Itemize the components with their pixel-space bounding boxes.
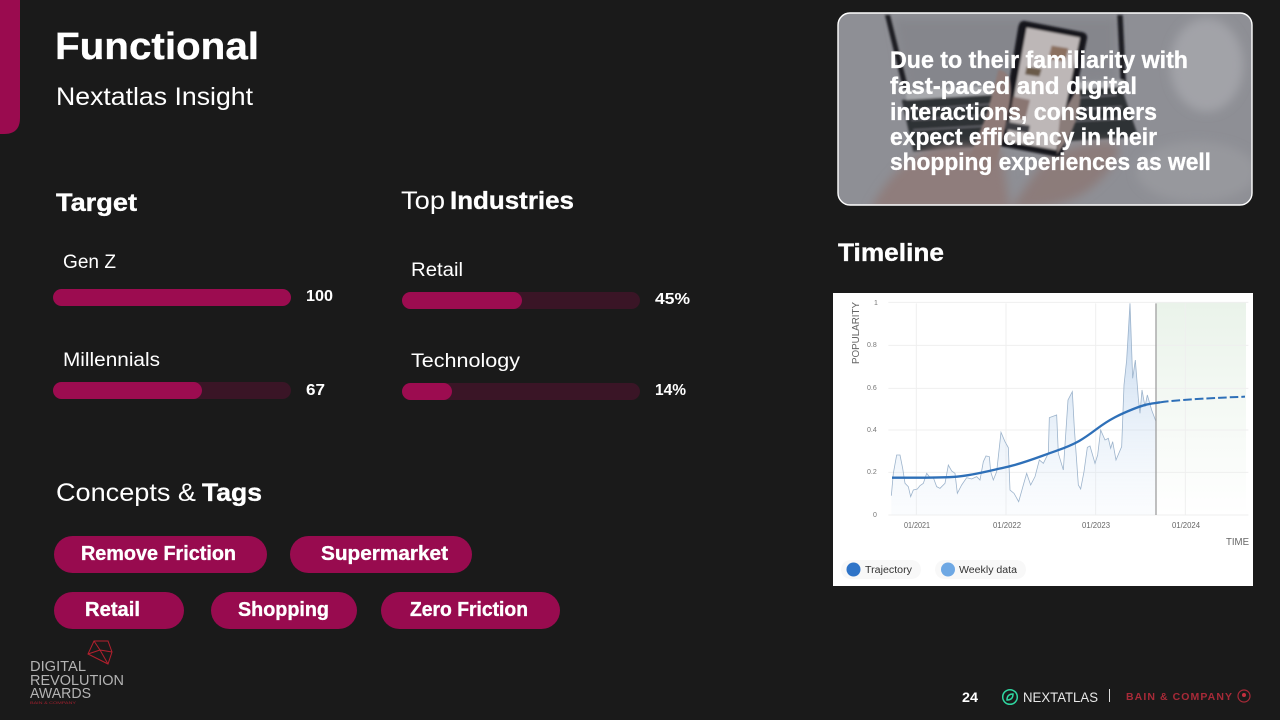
y axis labels	[867, 300, 878, 519]
y axis labels: 0.8	[867, 342, 877, 349]
photo: hands holding phone over laptop	[838, 13, 1257, 210]
heading: concepts and tags: Concepts &	[56, 479, 196, 507]
panel: top industries	[401, 187, 690, 400]
icon: bain logo	[1238, 690, 1250, 702]
insight text: interactions, consumers	[890, 99, 1157, 126]
x axis labels	[904, 521, 1201, 530]
label: Millennials: Millennials	[63, 350, 160, 371]
tag: Remove Friction: Remove Friction	[81, 543, 236, 565]
x axis labels: 01/2021	[904, 521, 930, 530]
tag: Shopping	[211, 592, 357, 629]
insight text: Due to their familiarity with	[890, 47, 1188, 74]
tag: Remove Friction	[54, 536, 267, 573]
y axis labels: 0.4	[867, 427, 877, 434]
footer	[962, 689, 1250, 705]
subtitle: Nextatlas Insight	[56, 83, 253, 111]
page number: 24	[962, 689, 978, 705]
logo: digital revolution awards: BAIN & COMPANY	[30, 700, 76, 705]
nextatlas wordmark: NEXTATLAS	[1023, 689, 1098, 705]
y axis title: POPULARITY	[851, 302, 862, 364]
tag: Supermarket: Supermarket	[321, 543, 448, 565]
line chart: popularity timeline	[833, 293, 1253, 586]
logo: digital revolution awards: AWARDS	[30, 685, 91, 702]
forecast zone	[1157, 302, 1246, 515]
y axis labels: 1	[874, 300, 878, 307]
legend	[841, 560, 1026, 579]
x axis labels: 01/2022	[993, 521, 1022, 530]
tag: Supermarket	[290, 536, 472, 573]
tag: Retail: Retail	[85, 599, 140, 621]
value: Retail: 45%	[655, 291, 690, 308]
title: Functional	[55, 26, 259, 68]
forecast line	[1160, 397, 1245, 402]
insight text: fast-paced and digital	[890, 73, 1137, 100]
panel: target	[53, 189, 333, 399]
tag: Zero Friction: Zero Friction	[410, 599, 528, 621]
value: Gen Z: 100	[306, 288, 333, 305]
heading: top industries	[401, 187, 574, 215]
legend: Weekly data	[959, 565, 1017, 576]
logo: digital revolution awards: REVOLUTION	[30, 672, 124, 689]
insight text	[890, 47, 1211, 176]
heading: timeline: Timeline	[838, 239, 944, 267]
weekly data area	[891, 303, 1156, 515]
heading: target: Target	[56, 189, 138, 217]
logo: digital revolution awards	[30, 641, 124, 705]
x axis title: TIME	[1226, 537, 1249, 548]
tag: Shopping: Shopping	[238, 599, 329, 621]
bar: Millennials	[53, 382, 291, 399]
insight text: expect efficiency in their	[890, 124, 1157, 151]
icon: polyhedron	[88, 641, 112, 664]
accent tab	[0, 0, 20, 134]
y axis labels: 0.6	[867, 385, 877, 392]
logo: digital revolution awards: DIGITAL	[30, 658, 86, 675]
trajectory line	[892, 402, 1160, 478]
tag: Zero Friction	[381, 592, 560, 629]
tag: Retail	[54, 592, 184, 629]
callout: photo card with insight	[838, 13, 1257, 210]
bar: Retail	[402, 292, 640, 309]
label: Retail: Retail	[411, 260, 463, 281]
current date marker	[1154, 303, 1158, 515]
x axis labels: 01/2023	[1082, 521, 1111, 530]
heading: top industries: Top	[401, 187, 445, 215]
y axis labels: 0	[873, 512, 877, 519]
card border	[838, 13, 1252, 205]
heading: top industries: Industries	[450, 187, 574, 215]
bar: Technology	[402, 383, 640, 400]
heading: concepts and tags: Tags	[202, 479, 262, 507]
value: Technology: 14%	[655, 382, 686, 399]
label: Technology: Technology	[411, 351, 521, 372]
value: Millennials: 67	[306, 382, 325, 399]
panel: concepts and tags	[54, 479, 560, 629]
legend: Trajectory	[865, 565, 912, 576]
bain wordmark: BAIN & COMPANY	[1126, 691, 1232, 703]
heading: concepts and tags	[56, 479, 262, 507]
weekly data line	[891, 303, 1156, 502]
bar: Gen Z	[53, 289, 291, 306]
label: Gen Z: Gen Z	[63, 252, 116, 273]
insight text: shopping experiences as well	[890, 149, 1211, 176]
x axis labels: 01/2024	[1172, 521, 1201, 530]
icon: nextatlas logo	[1003, 690, 1017, 704]
y axis labels: 0.2	[867, 469, 877, 476]
